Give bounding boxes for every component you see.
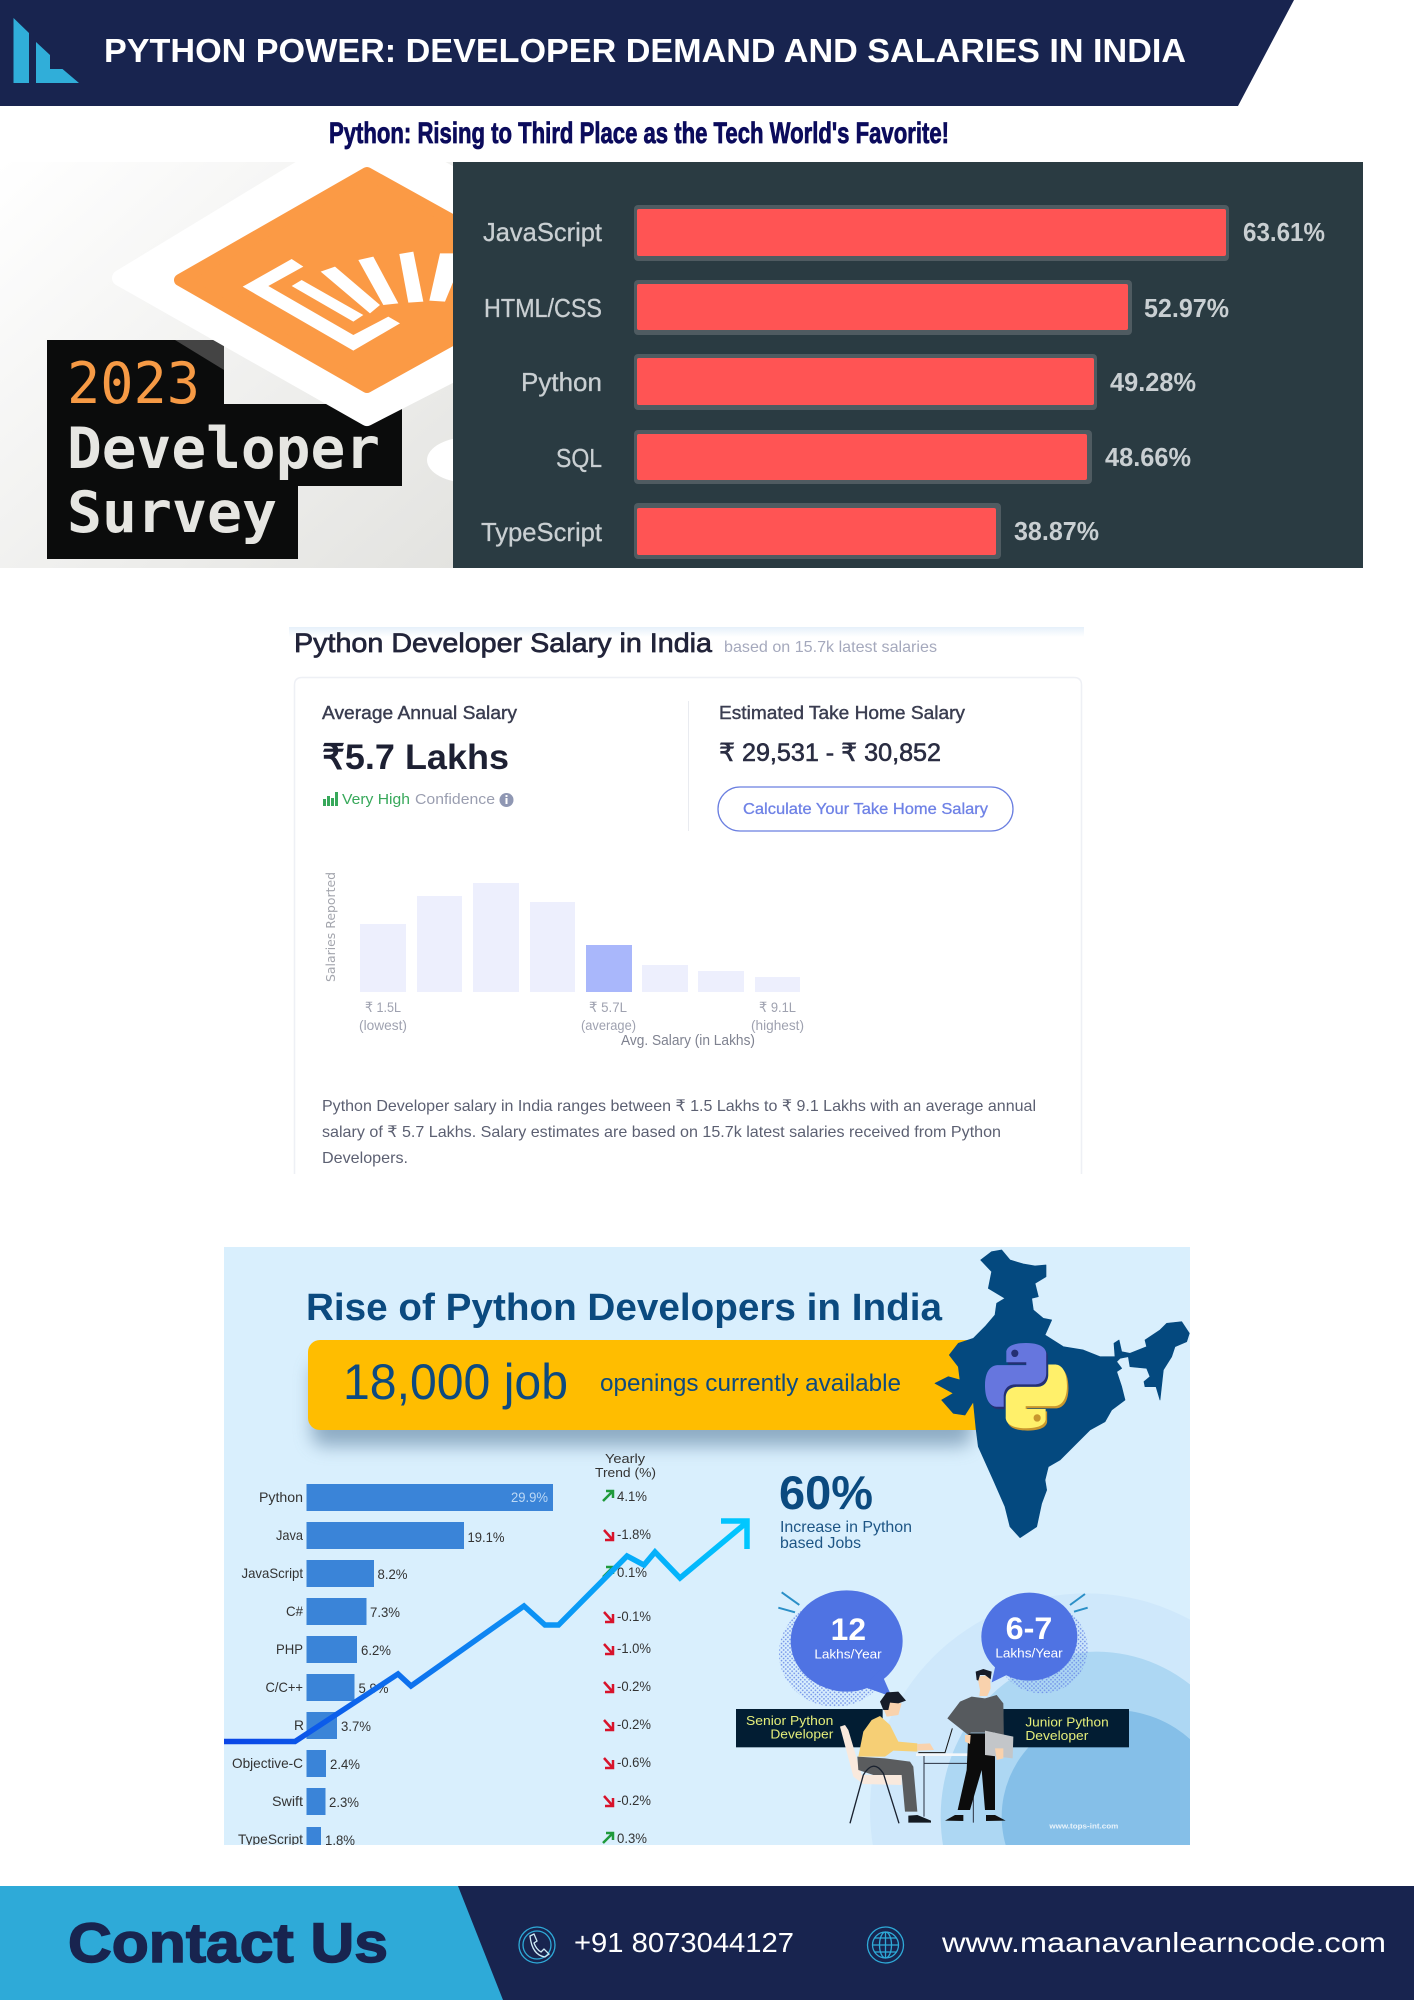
- website: www.maanavanlearncode.com: [941, 1927, 1386, 1958]
- language share bar chart: 29.9%: [511, 1489, 548, 1505]
- bar: Python: [521, 354, 1196, 410]
- panel: language popularity bar chart: [453, 162, 1363, 568]
- language share bar chart: Java: [276, 1527, 303, 1543]
- salary description: Developers.: [322, 1150, 408, 1167]
- survey text Developer: Developer: [67, 416, 380, 482]
- bar: TypeScript: TypeScript: [481, 517, 603, 547]
- average salary block: Confidence: [415, 791, 495, 808]
- survey text 2023: 2023: [67, 351, 200, 417]
- average salary block: ₹5.7 Lakhs: [322, 738, 509, 777]
- banner: senior: Senior Python: [746, 1713, 833, 1728]
- yearly trend column: -1.0%: [617, 1641, 651, 1656]
- yearly trend column: [595, 1451, 656, 1846]
- language share bar chart: TypeScript: [238, 1831, 303, 1847]
- yearly trend column: 4.1%: [617, 1489, 647, 1504]
- language share bar chart: 3.7%: [341, 1718, 371, 1734]
- language share bar chart: 1.8%: [325, 1832, 355, 1848]
- salary histogram: Avg. Salary (in Lakhs): [621, 1033, 755, 1049]
- background circles: [870, 1594, 1190, 1845]
- salary histogram: Salaries Reported: [324, 872, 338, 982]
- bar: Python: Python: [521, 367, 602, 397]
- orange diamond with logo: [174, 167, 453, 393]
- icon: globe: [868, 1927, 904, 1963]
- button: [718, 787, 1013, 831]
- developers illustration: [840, 1669, 1013, 1823]
- bar: HTML/CSS: [484, 280, 1229, 335]
- average salary block: Average Annual Salary: [322, 703, 517, 723]
- salary histogram: (highest): [751, 1017, 804, 1033]
- desk and laptop: [916, 1728, 974, 1823]
- yearly trend column: Yearly: [605, 1451, 646, 1466]
- language share bar chart: R: [294, 1717, 304, 1733]
- 60 percent stat: based Jobs: [780, 1535, 861, 1552]
- icon: logo: [14, 18, 79, 83]
- contact block: [0, 1886, 503, 2000]
- banner: senior: Developer: [770, 1726, 834, 1741]
- yearly trend column: 0.1%: [617, 1565, 647, 1580]
- salary description: [322, 1098, 1036, 1167]
- button: Calculate Your Take Home Salary: [743, 801, 988, 818]
- job openings callout: [308, 1340, 988, 1446]
- language share bar chart: 2.4%: [330, 1756, 360, 1772]
- language share bar chart: 8.2%: [378, 1566, 408, 1582]
- banner: senior: [736, 1709, 883, 1747]
- panel: developer survey image: [0, 162, 453, 568]
- survey text Survey: Survey: [67, 480, 277, 546]
- icon: confidence bars: [323, 792, 338, 806]
- trend arrow line: [224, 1521, 747, 1742]
- bar: HTML/CSS: HTML/CSS: [484, 293, 602, 323]
- bubble: junior salary: Lakhs/Year: [995, 1645, 1063, 1660]
- salary description: salary of ₹ 5.7 Lakhs. Salary estimates are based on 15.7k latest salaries received from Python: [322, 1124, 1001, 1141]
- yearly trend column: -0.2%: [617, 1679, 651, 1694]
- salary histogram: (average): [581, 1017, 636, 1033]
- yearly trend column: -1.8%: [617, 1527, 651, 1542]
- salary histogram: (lowest): [359, 1017, 407, 1033]
- yearly trend column: -0.2%: [617, 1717, 651, 1732]
- bar: SQL: 48.66%: [1105, 442, 1191, 472]
- survey black label: [47, 340, 402, 559]
- language share bar chart: PHP: [276, 1641, 303, 1657]
- bar: SQL: SQL: [556, 443, 602, 473]
- icon: info: [500, 793, 514, 807]
- contact block: Contact Us: [68, 1911, 388, 1974]
- 60 percent stat: [780, 1476, 911, 1548]
- footer: [0, 1886, 1414, 2000]
- salary heading: Python Developer Salary in India: [294, 628, 713, 658]
- average salary block: Very High: [342, 791, 410, 808]
- salary description: Python Developer salary in India ranges between ₹ 1.5 Lakhs to ₹ 9.1 Lakhs with an average annual: [322, 1098, 1036, 1115]
- language share bar chart: [232, 1484, 553, 1854]
- yearly trend column: -0.1%: [617, 1609, 651, 1624]
- bar: JavaScript: [483, 205, 1325, 261]
- subtitle: Python: Rising to Third Place as the Tech World's Favorite!: [329, 117, 949, 150]
- salary histogram: [324, 872, 804, 1049]
- banner: junior: Developer: [1025, 1728, 1089, 1743]
- salary heading note: based on 15.7k latest salaries: [724, 639, 937, 656]
- bar: HTML/CSS: 52.97%: [1144, 293, 1229, 323]
- yearly trend column: -0.6%: [617, 1755, 651, 1770]
- bar: SQL: [556, 430, 1191, 484]
- language share bar chart: Objective-C: [232, 1755, 303, 1771]
- language share bar chart: 19.1%: [468, 1529, 504, 1545]
- yearly trend column: 0.3%: [617, 1831, 647, 1846]
- language share bar chart: Swift: [272, 1793, 303, 1809]
- bubble: senior salary: [778, 1590, 903, 1707]
- white diamond: [112, 162, 453, 426]
- bar: TypeScript: [481, 503, 1099, 559]
- language share bar chart: 7.3%: [370, 1604, 400, 1620]
- bar: Python: 49.28%: [1110, 367, 1196, 397]
- banner: junior: Junior Python: [1025, 1715, 1109, 1730]
- language share bar chart: 5.9%: [358, 1680, 388, 1696]
- source credit: www.tops-int.com: [1048, 1821, 1119, 1830]
- language share bar chart: 6.2%: [361, 1642, 391, 1658]
- yearly trend column: -0.2%: [617, 1793, 651, 1808]
- language share bar chart: Python: [259, 1489, 303, 1505]
- icon: india map: [935, 1250, 1189, 1538]
- bar: TypeScript: 38.87%: [1014, 516, 1099, 546]
- language share bar chart: C/C++: [266, 1679, 303, 1695]
- job openings callout: 18,000 job: [343, 1354, 568, 1410]
- developer: sitting: [840, 1692, 934, 1823]
- bubble: senior salary: Lakhs/Year: [814, 1646, 882, 1661]
- title: PYTHON POWER: DEVELOPER DEMAND AND SALARIES IN INDIA: [104, 32, 1186, 69]
- header banner: [0, 0, 1294, 106]
- salary histogram: ₹ 9.1L: [759, 999, 796, 1015]
- take home block: [718, 703, 1013, 831]
- yearly trend column: Trend (%): [595, 1465, 656, 1480]
- developer: standing: [945, 1669, 1013, 1821]
- bubble: junior salary: [981, 1593, 1088, 1693]
- average salary block: [322, 703, 517, 808]
- 60 percent stat: 60%: [779, 1466, 873, 1519]
- language share bar chart: 2.3%: [329, 1794, 359, 1810]
- take home block: ₹ 29,531 - ₹ 30,852: [719, 739, 941, 767]
- phone number: +91 8073044127: [574, 1927, 794, 1958]
- salary histogram: ₹ 1.5L: [365, 999, 401, 1015]
- bubble: senior salary: 12: [831, 1611, 866, 1647]
- panel: salary card: [289, 627, 1084, 1174]
- bubble: junior salary: 6-7: [1006, 1610, 1052, 1646]
- job openings callout: openings currently available: [600, 1370, 901, 1397]
- icon: phone: [519, 1927, 555, 1963]
- rise heading: Rise of Python Developers in India: [306, 1287, 943, 1329]
- bar: JavaScript: 63.61%: [1243, 217, 1325, 247]
- salary speech bubbles and banners: [736, 1590, 1129, 1830]
- banner: junior: [1003, 1709, 1129, 1747]
- panel: rise of python developers: [224, 1247, 1190, 1845]
- bar: JavaScript: JavaScript: [483, 217, 603, 247]
- icon: python logo: [985, 1343, 1068, 1431]
- 60 percent stat: Increase in Python: [780, 1519, 912, 1536]
- language share bar chart: C#: [286, 1603, 303, 1619]
- language share bar chart: JavaScript: [242, 1565, 303, 1581]
- take home block: Estimated Take Home Salary: [719, 703, 965, 723]
- salary histogram: ₹ 5.7L: [589, 999, 627, 1015]
